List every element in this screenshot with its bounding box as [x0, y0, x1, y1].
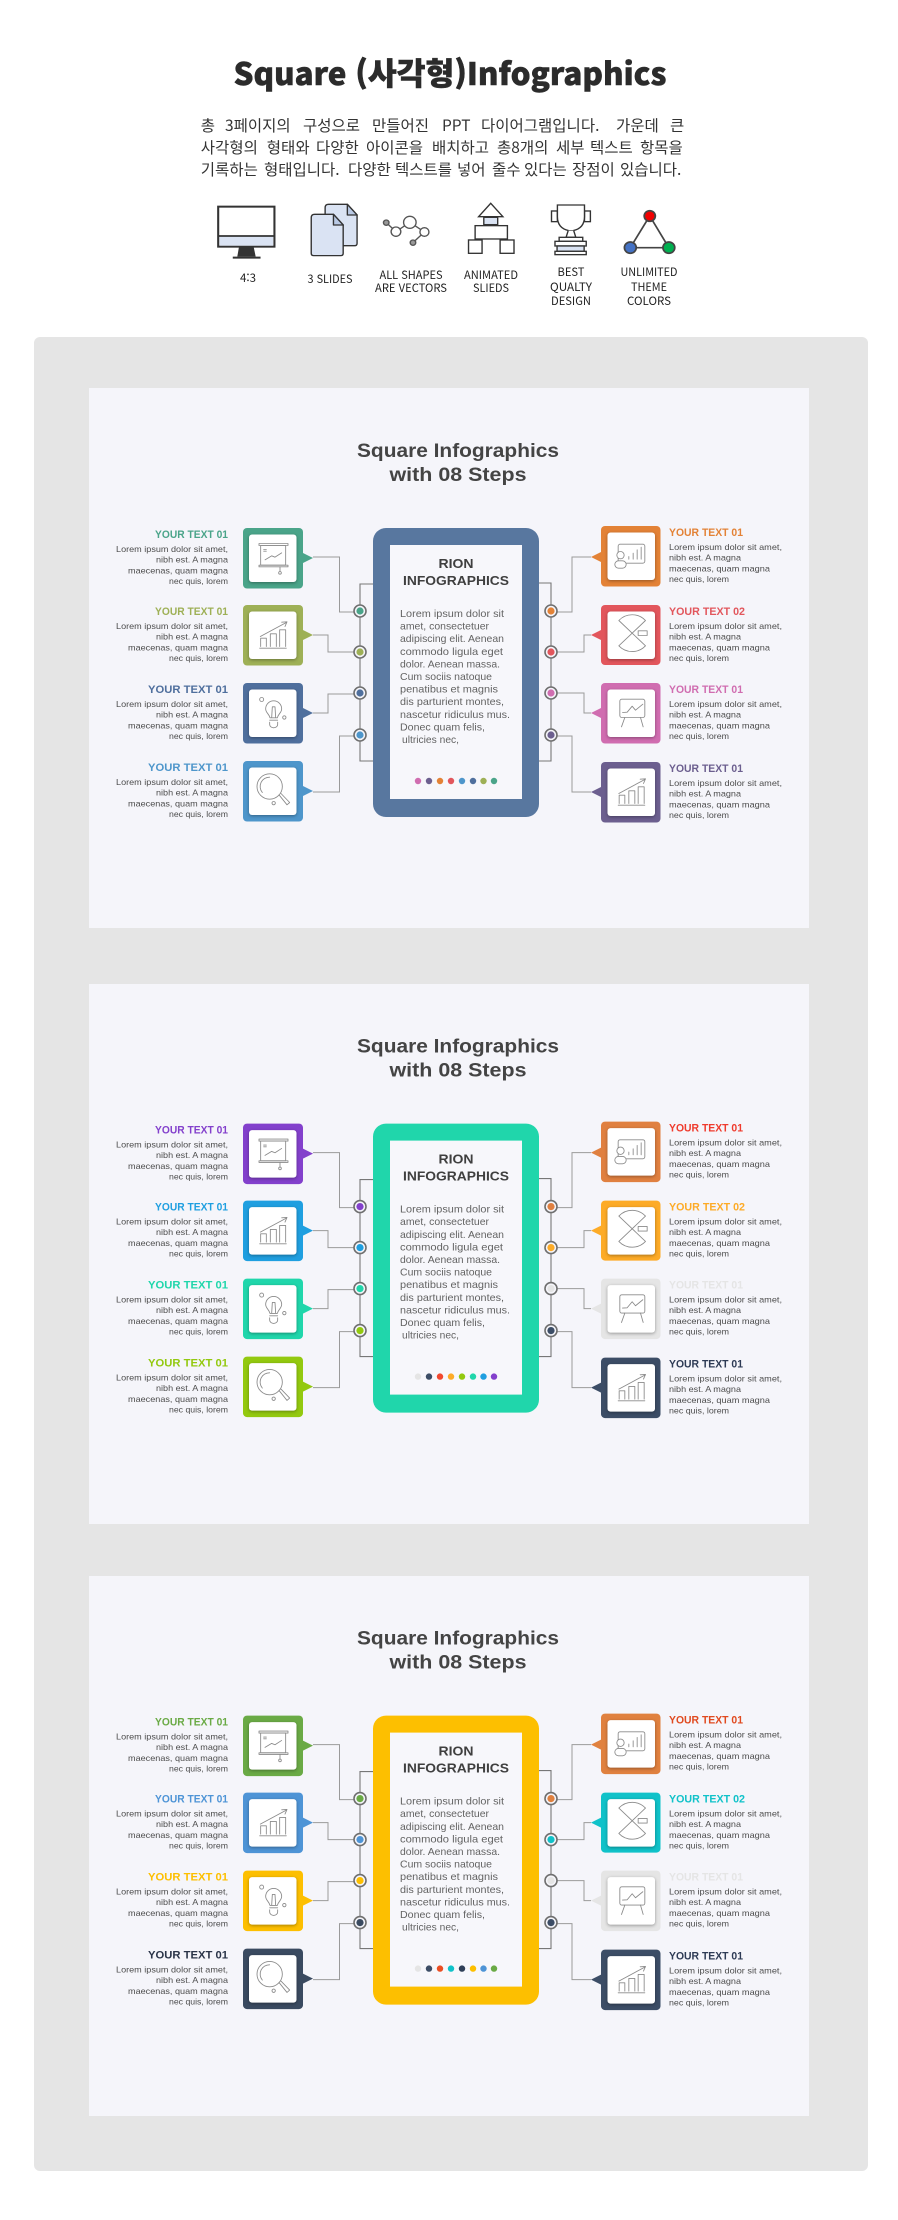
left item 4 [116, 761, 313, 822]
center body text: Cum sociis natoque [400, 1859, 492, 1871]
intro paragraph: 배치하고 [432, 136, 489, 158]
feature labels: COLORS [627, 293, 671, 309]
left item 2: nec quis, lorem [169, 1249, 228, 1259]
slide 3: yellow theme [89, 1576, 809, 2116]
icon: pie cross [619, 1210, 647, 1247]
left item 2: YOUR TEXT 01 [155, 1794, 228, 1806]
left item 2: Lorem ipsum dolor sit amet, [116, 621, 228, 631]
left item 1: maecenas, quam magna [128, 1753, 228, 1763]
center heading: INFOGRAPHICS [403, 573, 509, 588]
center body text: Cum sociis natoque [400, 671, 492, 683]
right item 1: YOUR TEXT 01 [669, 1123, 743, 1135]
right item 3: maecenas, quam magna [669, 1316, 770, 1326]
right item 4 [591, 1358, 782, 1418]
icon: light bulb [260, 697, 286, 728]
intro paragraph: 기록하는 [201, 158, 258, 180]
center body text: nascetur ridiculus mus. [400, 709, 510, 721]
slide title: Square Infographics [357, 1037, 559, 1058]
left item 1: nibh est. A magna [156, 555, 228, 565]
center body text: ultricies nec, [402, 734, 459, 746]
icon: projector [259, 1139, 288, 1170]
left item 3: nibh est. A magna [156, 710, 228, 720]
right item 4: Lorem ipsum dolor sit amet, [669, 1966, 782, 1976]
left item 4: YOUR TEXT 01 [148, 1950, 228, 1962]
right item 2: nibh est. A magna [669, 632, 741, 642]
feature labels: 3 SLIDES [308, 271, 353, 287]
left item 3: YOUR TEXT 01 [148, 684, 228, 696]
left item 4: nibh est. A magna [156, 1975, 228, 1985]
center heading: INFOGRAPHICS [403, 1169, 509, 1184]
icon: chart board [620, 1295, 645, 1322]
intro paragraph: 다양한 [316, 136, 359, 158]
timeline rings [354, 1793, 557, 1929]
intro paragraph: 구성으로 [303, 114, 360, 136]
left item 4: Lorem ipsum dolor sit amet, [116, 1965, 228, 1975]
center body text: dolor. Aenean massa. [400, 1254, 500, 1266]
feature labels: UNLIMITED [620, 264, 678, 280]
intro paragraph [201, 114, 684, 180]
right item 3: maecenas, quam magna [669, 720, 770, 730]
slide title [357, 1037, 559, 1082]
slide title [357, 441, 559, 486]
left item 3: YOUR TEXT 01 [148, 1872, 228, 1884]
right item 4: nibh est. A magna [669, 1976, 741, 1986]
left item 2: maecenas, quam magna [128, 642, 228, 652]
center body text: penatibus et magnis [400, 1871, 498, 1883]
left item 2: maecenas, quam magna [128, 1238, 228, 1248]
center body text: Donec quam felis, [400, 721, 485, 733]
icon: growth chart [618, 1374, 645, 1401]
right item 1: nibh est. A magna [669, 1740, 741, 1750]
right item 2: nibh est. A magna [669, 1227, 741, 1237]
left item 3: Lorem ipsum dolor sit amet, [116, 1887, 228, 1897]
left item 3: Lorem ipsum dolor sit amet, [116, 699, 228, 709]
center body text: Lorem ipsum dolor sit [400, 1796, 504, 1808]
center body text: Lorem ipsum dolor sit [400, 608, 504, 620]
center body text [400, 1204, 510, 1342]
right item 1: maecenas, quam magna [669, 563, 770, 573]
right item 1 [591, 1122, 782, 1182]
center body text [400, 1796, 510, 1934]
intro paragraph: 아이콘을 [366, 136, 423, 158]
intro paragraph: 다이어그램입니다. [481, 114, 599, 136]
left item 1: maecenas, quam magna [128, 565, 228, 575]
icon: presenter [615, 544, 645, 568]
right item 2 [591, 1201, 782, 1261]
timeline rings [354, 1201, 557, 1337]
right item 1: Lorem ipsum dolor sit amet, [669, 542, 782, 552]
right item 3: nibh est. A magna [669, 1897, 741, 1907]
left item 2: nibh est. A magna [156, 1227, 228, 1237]
left item 3: nec quis, lorem [169, 731, 228, 741]
right item 2: YOUR TEXT 02 [669, 1794, 745, 1806]
icon: growth chart [618, 779, 645, 805]
right item 3: nec quis, lorem [669, 1327, 729, 1337]
center body text: amet, consectetuer [400, 1808, 490, 1820]
icon: chart board [620, 699, 645, 727]
center heading: RION [438, 1152, 474, 1167]
right item 3 [591, 1279, 782, 1339]
left item 2: YOUR TEXT 01 [155, 606, 228, 618]
intro paragraph: 넣어 [457, 158, 486, 180]
intro paragraph: 다양한 [348, 158, 391, 180]
left item 4: maecenas, quam magna [128, 798, 228, 808]
left item 1: nec quis, lorem [169, 1172, 228, 1182]
feature labels: SLIEDS [473, 280, 509, 296]
right item 3: nec quis, lorem [669, 1919, 729, 1929]
right item 3: nibh est. A magna [669, 710, 741, 720]
center heading [403, 1152, 509, 1184]
icon: magnifier [257, 1961, 290, 1992]
icon: presenter [615, 1732, 645, 1756]
left item 3: nibh est. A magna [156, 1305, 228, 1315]
left item 2: YOUR TEXT 01 [155, 1202, 228, 1214]
right item 4: YOUR TEXT 01 [669, 1951, 743, 1963]
right item 2: YOUR TEXT 02 [669, 1202, 745, 1214]
center body text: penatibus et magnis [400, 1279, 498, 1291]
right item 3: nec quis, lorem [669, 731, 729, 741]
intro paragraph: 큰 [670, 114, 684, 136]
center panel [373, 528, 539, 817]
center panel [373, 1124, 539, 1413]
right item 3: Lorem ipsum dolor sit amet, [669, 1887, 782, 1897]
icon: growth chart [618, 1966, 645, 1993]
intro paragraph: 텍스트 [590, 136, 633, 158]
icon: slides [311, 204, 357, 256]
intro paragraph: 장점이 [572, 158, 615, 180]
left item 1: nec quis, lorem [169, 576, 228, 586]
center body text: ultricies nec, [402, 1922, 459, 1934]
right item 1: maecenas, quam magna [669, 1751, 770, 1761]
left item 4: nibh est. A magna [156, 788, 228, 798]
right item 4 [591, 1950, 782, 2010]
intro paragraph: 줄수 [492, 158, 521, 180]
left item 2 [116, 1201, 313, 1261]
right item 2: Lorem ipsum dolor sit amet, [669, 1217, 782, 1227]
left item 4: YOUR TEXT 01 [148, 1358, 228, 1370]
left item 1 [116, 528, 313, 588]
right item 2 [591, 605, 782, 665]
feature labels: 4:3 [240, 270, 256, 286]
left item 4: nec quis, lorem [169, 809, 228, 819]
icon: trophy [552, 205, 590, 255]
intro paragraph: 사각형의 [201, 136, 258, 158]
left item 2: maecenas, quam magna [128, 1830, 228, 1840]
left item 2 [116, 1793, 313, 1853]
gray background panel [34, 337, 868, 2171]
right item 1: Lorem ipsum dolor sit amet, [669, 1730, 782, 1740]
intro paragraph: 형태입니다. [264, 158, 340, 180]
center body text: dis parturient montes, [400, 1884, 504, 1896]
icon: vector nodes [383, 216, 429, 245]
left item 3: maecenas, quam magna [128, 720, 228, 730]
feature labels: DESIGN [551, 293, 591, 309]
center body text: nascetur ridiculus mus. [400, 1304, 510, 1316]
icon: growth chart [260, 622, 287, 648]
right item 4: maecenas, quam magna [669, 799, 770, 809]
right item 3: Lorem ipsum dolor sit amet, [669, 1295, 782, 1305]
center body text: Cum sociis natoque [400, 1267, 492, 1279]
left item 4: maecenas, quam magna [128, 1394, 228, 1404]
right item 4: nec quis, lorem [669, 1406, 729, 1416]
left item 4 [116, 1949, 313, 2009]
intro paragraph: 있습니다. [620, 158, 681, 180]
center body text: adipiscing elit. Aenean [400, 1821, 504, 1833]
right item 2 [591, 1793, 782, 1853]
left item 3 [116, 683, 313, 744]
left item 1 [116, 1124, 313, 1184]
center body text: penatibus et magnis [400, 684, 498, 696]
feature icons row [218, 203, 678, 309]
center body text: amet, consectetuer [400, 621, 490, 633]
intro paragraph: 항목을 [640, 136, 683, 158]
right item 1: Lorem ipsum dolor sit amet, [669, 1138, 782, 1148]
center body text: amet, consectetuer [400, 1216, 490, 1228]
timeline rings [354, 605, 557, 741]
icon: theme colors [624, 211, 675, 253]
connector lines [313, 557, 591, 792]
center body text: dolor. Aenean massa. [400, 658, 500, 670]
center body text: commodo ligula eget [400, 1833, 503, 1845]
center body text: adipiscing elit. Aenean [400, 633, 504, 645]
center body text: dis parturient montes, [400, 696, 504, 708]
left item 4: YOUR TEXT 01 [148, 762, 228, 774]
color dots [415, 1373, 497, 1380]
left item 2: nec quis, lorem [169, 1841, 228, 1851]
right item 3: maecenas, quam magna [669, 1908, 770, 1918]
left item 2: nibh est. A magna [156, 632, 228, 642]
left item 3 [116, 1279, 313, 1339]
slide 2: teal theme [89, 984, 809, 1524]
right item 2: Lorem ipsum dolor sit amet, [669, 1809, 782, 1819]
color dots [415, 1965, 497, 1972]
title: Square (사각형)Infographics [234, 49, 666, 94]
left item 1: maecenas, quam magna [128, 1161, 228, 1171]
left item 3: nec quis, lorem [169, 1327, 228, 1337]
center body text: nascetur ridiculus mus. [400, 1896, 510, 1908]
right item 2: Lorem ipsum dolor sit amet, [669, 621, 782, 631]
intro paragraph: PPT [442, 114, 470, 136]
center body text [400, 608, 510, 746]
connector lines [313, 1745, 591, 1980]
right item 1: YOUR TEXT 01 [669, 527, 743, 539]
icon: presenter [615, 1140, 645, 1164]
left item 4: Lorem ipsum dolor sit amet, [116, 1373, 228, 1383]
right item 2: YOUR TEXT 02 [669, 606, 745, 618]
icon: animated hierarchy [469, 203, 514, 253]
feature labels: ARE VECTORS [375, 280, 447, 296]
icon: magnifier [257, 774, 290, 805]
left item 1: nec quis, lorem [169, 1764, 228, 1774]
intro paragraph: 있다는 [524, 158, 567, 180]
left item 4: maecenas, quam magna [128, 1986, 228, 1996]
icon: pie cross [619, 1802, 647, 1839]
slide title: with 08 Steps [388, 465, 526, 486]
color dots [415, 778, 497, 784]
right item 2: nibh est. A magna [669, 1819, 741, 1829]
right item 3: YOUR TEXT 01 [669, 1872, 743, 1884]
feature labels [240, 264, 678, 309]
right item 2: maecenas, quam magna [669, 1830, 770, 1840]
center heading: RION [438, 556, 474, 571]
right item 3 [591, 1871, 782, 1931]
right item 4 [591, 762, 782, 822]
intro paragraph: 형태와 [267, 136, 310, 158]
left item 1: YOUR TEXT 01 [155, 529, 228, 541]
icon: projector [259, 1731, 288, 1762]
right item 1: YOUR TEXT 01 [669, 1715, 743, 1727]
slide title: Square Infographics [357, 441, 559, 462]
right item 4: nibh est. A magna [669, 1384, 741, 1394]
center heading: INFOGRAPHICS [403, 1761, 509, 1776]
left item 1: YOUR TEXT 01 [155, 1125, 228, 1137]
right item 1 [591, 526, 782, 586]
left item 2 [116, 605, 313, 666]
left item 3: nibh est. A magna [156, 1897, 228, 1907]
intro paragraph: 텍스트를 [395, 158, 452, 180]
intro paragraph: 총 [201, 114, 215, 136]
right item 1: nec quis, lorem [669, 1170, 729, 1180]
left item 4: nibh est. A magna [156, 1383, 228, 1393]
right item 1: maecenas, quam magna [669, 1159, 770, 1169]
center body text: Lorem ipsum dolor sit [400, 1204, 504, 1216]
feature labels: BEST [558, 264, 585, 280]
center body text: dolor. Aenean massa. [400, 1846, 500, 1858]
right item 3: YOUR TEXT 01 [669, 1280, 743, 1292]
intro paragraph: 총8개의 [497, 136, 548, 158]
left item 3: maecenas, quam magna [128, 1908, 228, 1918]
right item 4: maecenas, quam magna [669, 1395, 770, 1405]
left item 4: Lorem ipsum dolor sit amet, [116, 777, 228, 787]
left item 1: nibh est. A magna [156, 1742, 228, 1752]
right item 1: nec quis, lorem [669, 574, 729, 584]
left item 1: Lorem ipsum dolor sit amet, [116, 1732, 228, 1742]
intro paragraph: 가운데 [616, 114, 659, 136]
right item 4: Lorem ipsum dolor sit amet, [669, 1374, 782, 1384]
center body text: Donec quam felis, [400, 1317, 485, 1329]
icon: growth chart [260, 1217, 287, 1244]
right item 4: maecenas, quam magna [669, 1987, 770, 1997]
left item 1: YOUR TEXT 01 [155, 1717, 228, 1729]
left item 3: Lorem ipsum dolor sit amet, [116, 1295, 228, 1305]
right item 4: nec quis, lorem [669, 1998, 729, 2008]
center body text: commodo ligula eget [400, 1241, 503, 1253]
slide title: Square Infographics [357, 1629, 559, 1650]
center body text: Donec quam felis, [400, 1909, 485, 1921]
left item 3: YOUR TEXT 01 [148, 1280, 228, 1292]
intro paragraph: 3페이지의 [225, 114, 291, 136]
left item 4 [116, 1357, 313, 1417]
left item 2: Lorem ipsum dolor sit amet, [116, 1809, 228, 1819]
right item 3: Lorem ipsum dolor sit amet, [669, 699, 782, 709]
right item 1: nibh est. A magna [669, 553, 741, 563]
left item 3 [116, 1871, 313, 1931]
left item 3: nec quis, lorem [169, 1919, 228, 1929]
center body text: commodo ligula eget [400, 646, 503, 658]
left item 1: Lorem ipsum dolor sit amet, [116, 1140, 228, 1150]
slide title: with 08 Steps [388, 1061, 526, 1082]
feature labels: THEME [631, 279, 667, 295]
feature labels: ANIMATED [464, 267, 518, 283]
right item 1: nec quis, lorem [669, 1762, 729, 1772]
right item 2: nec quis, lorem [669, 653, 729, 663]
left item 1 [116, 1716, 313, 1776]
right item 1 [591, 1714, 782, 1774]
right item 4: nec quis, lorem [669, 810, 729, 820]
center heading: RION [438, 1744, 474, 1759]
icon: growth chart [260, 1809, 287, 1836]
center body text: dis parturient montes, [400, 1292, 504, 1304]
right item 1: nibh est. A magna [669, 1148, 741, 1158]
icon: projector [259, 543, 288, 574]
center heading [403, 1744, 509, 1776]
center body text: ultricies nec, [402, 1330, 459, 1342]
intro paragraph: 만들어진 [372, 114, 429, 136]
icon: light bulb [260, 1293, 286, 1323]
icon: magnifier [257, 1369, 290, 1400]
right item 3 [591, 683, 782, 744]
right item 2: maecenas, quam magna [669, 642, 770, 652]
icon: light bulb [260, 1885, 286, 1915]
right item 3: nibh est. A magna [669, 1305, 741, 1315]
left item 4: nec quis, lorem [169, 1405, 228, 1415]
icon: pie cross [619, 615, 647, 652]
center panel [373, 1716, 539, 2005]
left item 4: nec quis, lorem [169, 1997, 228, 2007]
right item 4: Lorem ipsum dolor sit amet, [669, 778, 782, 788]
intro paragraph: 세부 [556, 136, 585, 158]
left item 1: Lorem ipsum dolor sit amet, [116, 544, 228, 554]
center heading [403, 556, 509, 588]
left item 2: Lorem ipsum dolor sit amet, [116, 1217, 228, 1227]
left item 2: nec quis, lorem [169, 653, 228, 663]
icon: monitor [218, 207, 274, 258]
feature labels: QUALTY [550, 279, 593, 295]
slide 1: blue theme [89, 388, 809, 928]
right item 2: maecenas, quam magna [669, 1238, 770, 1248]
left item 2: nibh est. A magna [156, 1819, 228, 1829]
icon: chart board [620, 1887, 645, 1914]
slide title [357, 1629, 559, 1674]
right item 4: YOUR TEXT 01 [669, 1359, 743, 1371]
left item 3: maecenas, quam magna [128, 1316, 228, 1326]
right item 2: nec quis, lorem [669, 1249, 729, 1259]
feature labels: ALL SHAPES [380, 267, 443, 283]
right item 2: nec quis, lorem [669, 1841, 729, 1851]
left item 1: nibh est. A magna [156, 1150, 228, 1160]
right item 4: nibh est. A magna [669, 789, 741, 799]
center body text: adipiscing elit. Aenean [400, 1229, 504, 1241]
right item 4: YOUR TEXT 01 [669, 763, 743, 775]
slide title: with 08 Steps [388, 1653, 526, 1674]
right item 3: YOUR TEXT 01 [669, 684, 743, 696]
connector lines [313, 1153, 591, 1388]
